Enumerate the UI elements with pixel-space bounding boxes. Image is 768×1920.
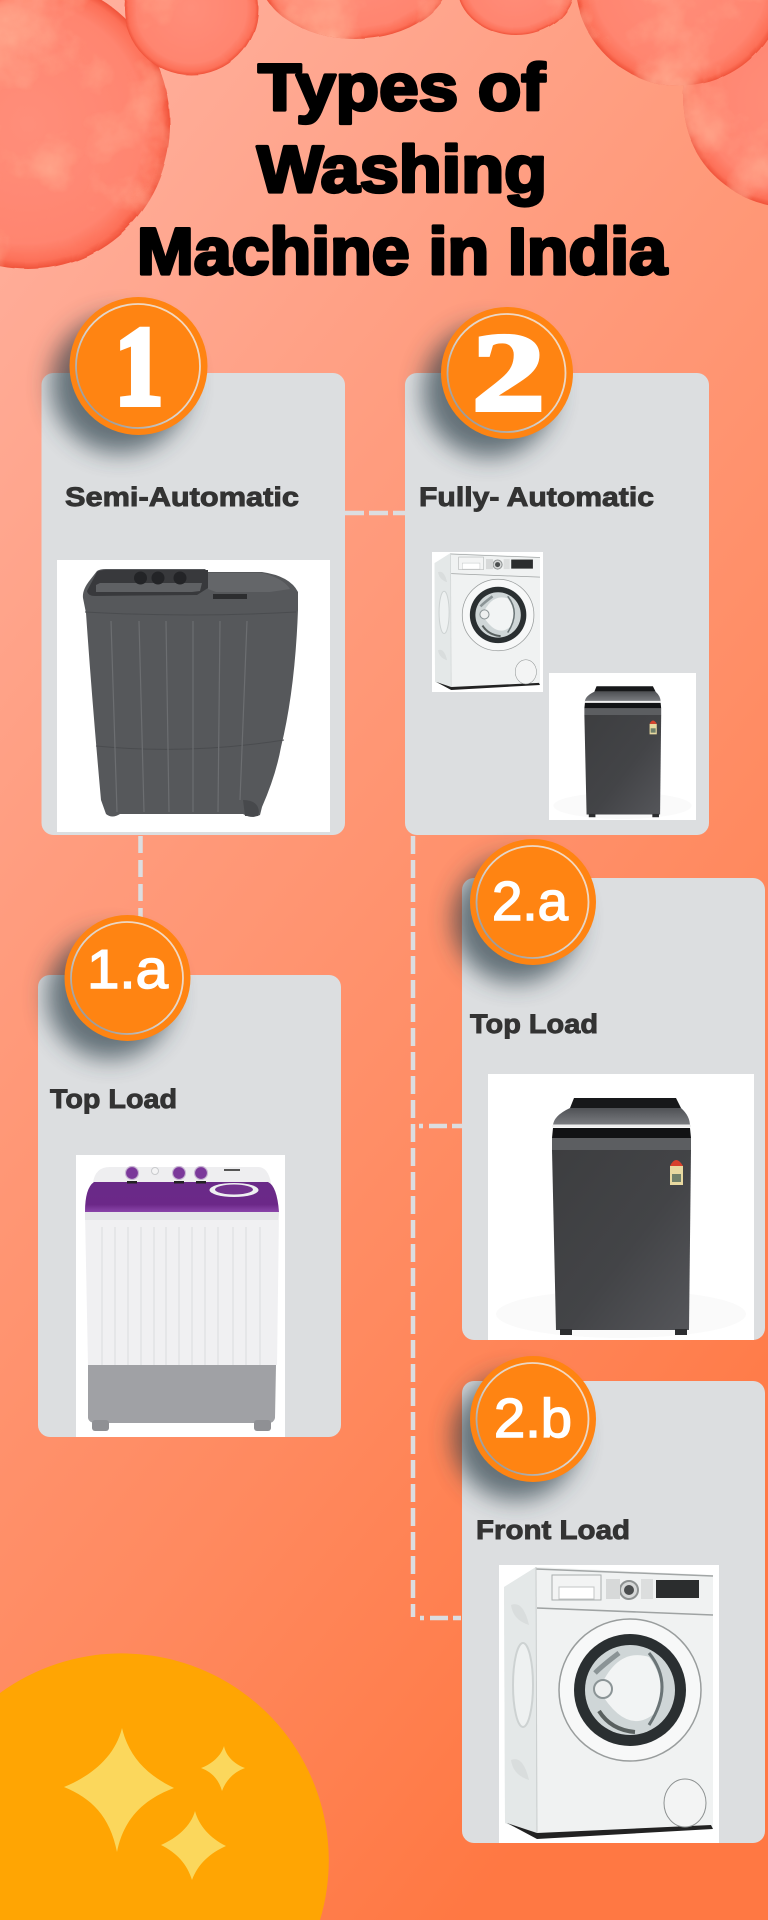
- image: small front load machine: [432, 552, 543, 692]
- heading: top load 2.a: Top Load: [470, 1009, 598, 1039]
- image: dark top load machine: [488, 1074, 754, 1340]
- image: white front load machine: [499, 1565, 719, 1843]
- title: Washing: [257, 132, 547, 206]
- shadow: badge 1.a: [47, 933, 173, 1059]
- heading: top load 1.a: Top Load: [50, 1084, 177, 1114]
- badge: 1.a: [64, 915, 190, 1041]
- badge: 1.a: 1.a: [87, 938, 168, 1000]
- image: grey semi-automatic machine: [57, 560, 330, 832]
- shadow: badge 2.a: [453, 857, 579, 983]
- heading: fully-automatic: Fully- Automatic: [419, 482, 654, 512]
- badge: 1: 1: [115, 305, 163, 429]
- shadow: badge 1: [51, 315, 189, 453]
- panel: 1.a top load: [38, 933, 341, 1437]
- panel: 2.a top load: [453, 857, 765, 1340]
- title: Machine in India: [137, 214, 668, 288]
- decorative yellow circle with sparkles: [0, 1653, 329, 1920]
- image: small top load machine: [549, 673, 696, 820]
- badge: 2.a: 2.a: [492, 870, 568, 932]
- panel: fully-automatic: [405, 325, 709, 835]
- connector lines: [140, 513, 462, 1618]
- title: Types of: [258, 50, 546, 124]
- icon: large sparkle: [64, 1728, 174, 1852]
- panel: 2.b front load: [453, 1374, 765, 1843]
- shadow: badge 2.b: [453, 1374, 579, 1500]
- panel: semi-automatic: [42, 315, 345, 835]
- watercolor blobs: [0, 0, 768, 269]
- badge: 2.b: [470, 1356, 596, 1482]
- badge: 2.b: 2.b: [494, 1387, 572, 1449]
- badge: 2.a: [470, 839, 596, 965]
- icon: medium sparkle: [161, 1811, 226, 1880]
- image: purple top load machine: [76, 1155, 285, 1437]
- shadow: badge 2: [423, 325, 555, 457]
- badge: 2: [441, 307, 573, 439]
- badge: 1: [70, 297, 208, 435]
- title: [137, 50, 668, 288]
- heading: front load 2.b: Front Load: [476, 1515, 630, 1545]
- icon: small sparkle: [201, 1746, 245, 1791]
- badge: 2: 2: [472, 311, 545, 435]
- heading: semi-automatic: Semi-Automatic: [65, 482, 299, 512]
